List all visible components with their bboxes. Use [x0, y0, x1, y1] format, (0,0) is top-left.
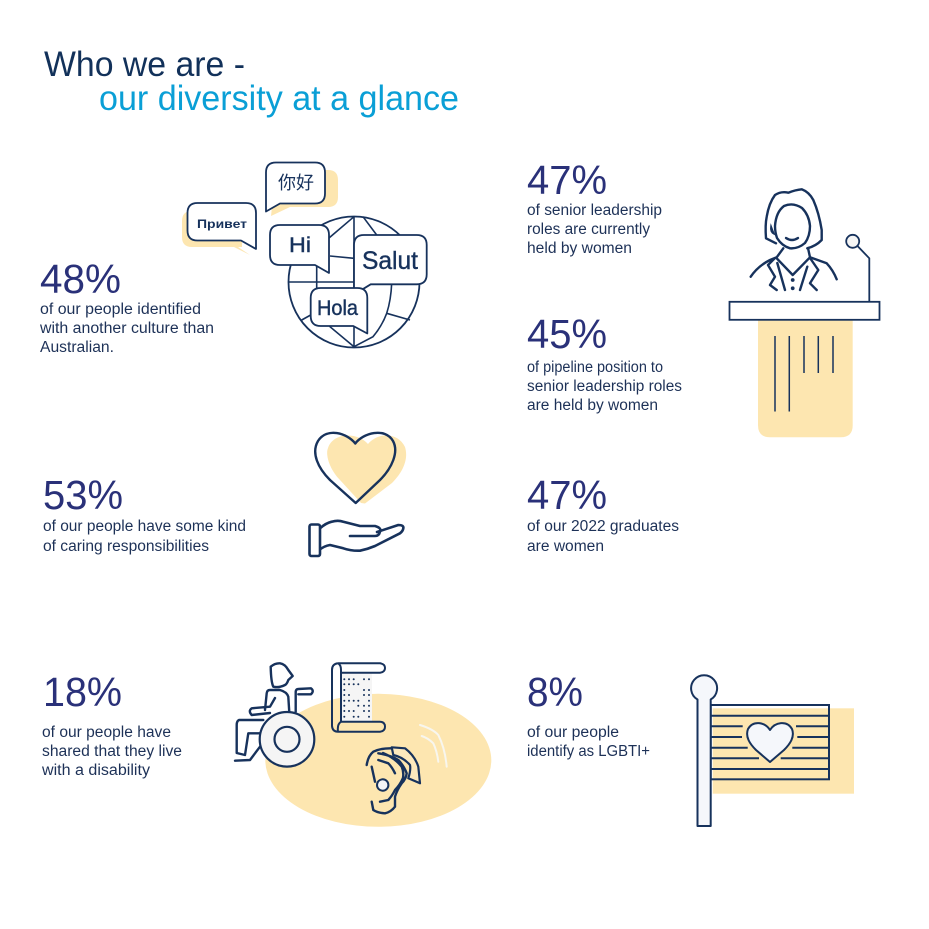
title [44, 45, 459, 118]
bubble: Russian [188, 203, 256, 249]
ear with hearing aid [367, 725, 447, 813]
stat: 8% LGBTI+ [527, 669, 650, 760]
bubble: Chinese [266, 162, 325, 212]
stat: 48% culture: of our people identified [40, 301, 201, 318]
icon: flag with heart [691, 675, 854, 826]
bubble: Russian: Привет [197, 219, 247, 231]
stat: 48% culture: 48% [40, 256, 121, 302]
stat: 48% culture: Australian. [40, 339, 114, 356]
title: Who we are - [44, 45, 245, 84]
stat: 45% pipeline: senior leadership roles [527, 378, 682, 395]
stat: 18% disability [41, 669, 182, 779]
icon: heart over hand [310, 433, 406, 556]
bubble: Salut [354, 235, 427, 292]
stat: 47% graduates [527, 472, 679, 555]
stat: 18% disability: with a disability [41, 762, 150, 779]
stat: 18% disability: of our people have [42, 724, 171, 741]
stat: 8% LGBTI+: 8% [527, 669, 583, 715]
stat: 47% graduates: of our 2022 graduates [527, 518, 679, 535]
stat: 45% pipeline: 45% [527, 311, 607, 357]
stat: 48% culture [39, 256, 214, 356]
hair [766, 189, 822, 248]
icon: accessibility group [235, 663, 491, 827]
stat: 18% disability: 18% [43, 669, 122, 715]
icon: globe with speech bubbles [182, 162, 427, 348]
stat: 45% pipeline [527, 311, 682, 414]
podium top [730, 302, 880, 320]
stat: 47% senior leadership: roles are currently [527, 221, 650, 238]
stat: 47% graduates: 47% [527, 472, 607, 518]
face [775, 204, 810, 248]
stat: 47% senior leadership: held by women [527, 240, 632, 257]
stat: 48% culture: with another culture than [39, 320, 214, 337]
shoulders and jacket [751, 248, 837, 290]
wheelchair user [235, 663, 314, 767]
stat: 53% caring [43, 472, 246, 555]
stat: 8% LGBTI+: of our people [527, 724, 619, 741]
stat: 47% senior leadership [527, 157, 662, 257]
stat: 18% disability: shared that they live [42, 743, 182, 760]
bubble: Hi: Hi [289, 234, 311, 257]
microphone [858, 246, 869, 302]
braille scroll [332, 663, 385, 732]
stat: 8% LGBTI+: identify as LGBTI+ [527, 743, 650, 760]
stat: 53% caring: of our people have some kind [43, 518, 246, 535]
stat: 53% caring: 53% [43, 472, 123, 518]
stat: 47% senior leadership: of senior leadership [527, 202, 662, 219]
stat: 47% senior leadership: 47% [527, 157, 607, 203]
bubble: Chinese: 你好 [278, 173, 314, 193]
stat: 45% pipeline: of pipeline position to [527, 359, 663, 376]
icon: woman at podium [730, 189, 880, 437]
stat: 53% caring: of caring responsibilities [43, 538, 209, 555]
stat: 45% pipeline: are held by women [527, 397, 658, 414]
podium lines [775, 336, 833, 412]
bubble: Hola: Hola [317, 297, 358, 320]
stat: 47% graduates: are women [527, 538, 604, 555]
bubble: Hi [270, 225, 329, 273]
bubble: Hola [311, 288, 367, 334]
title: our diversity at a glance [99, 79, 459, 118]
bubble: Salut: Salut [362, 247, 418, 275]
